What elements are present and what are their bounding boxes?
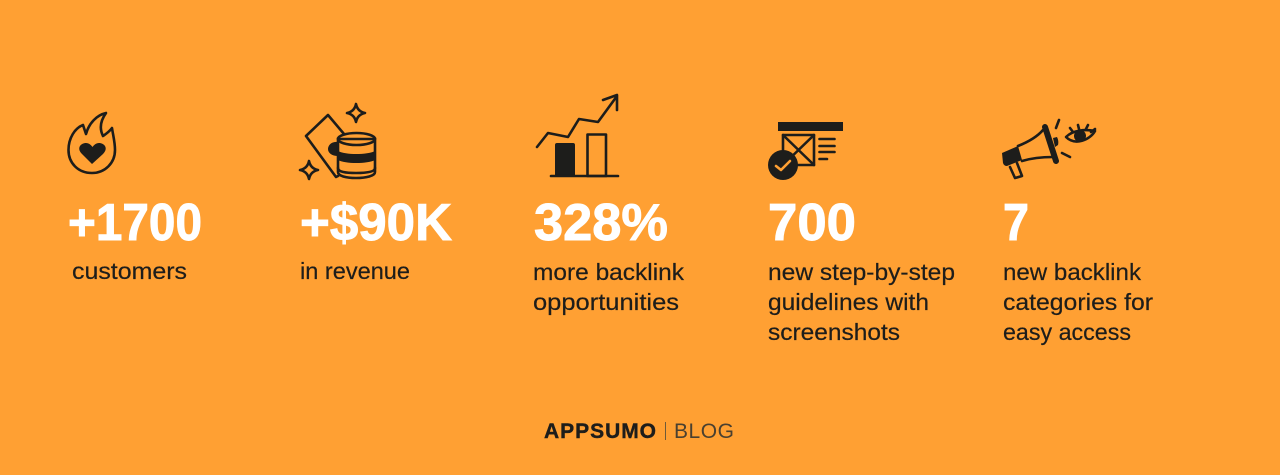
icon: growth chart: [537, 95, 618, 176]
label line 2: guidelines with: [768, 289, 929, 315]
panel: revenue: [300, 104, 452, 284]
label line 2: opportunities: [533, 289, 679, 315]
stat number: 7: [1003, 194, 1029, 252]
stat number: 700: [768, 194, 856, 252]
label line 2: categories for: [1003, 289, 1153, 315]
panel: customers: [68, 113, 202, 284]
label: customers: [72, 258, 187, 284]
label line 3: easy access: [1003, 319, 1131, 345]
logo: AppSumo Blog: [544, 420, 734, 443]
icon: megaphone and eye: [1002, 120, 1095, 178]
icon: document with check: [768, 122, 843, 180]
icon: card, coins and sparkles: [300, 104, 375, 179]
panel: backlink opportunities: [533, 95, 685, 315]
icon: flame with heart: [68, 113, 115, 173]
label: in revenue: [300, 258, 410, 284]
label: more backlink: [533, 259, 685, 285]
wordmark: APPSUMO: [544, 420, 656, 443]
stat number: +$90K: [300, 194, 452, 252]
panel: guidelines: [768, 122, 955, 345]
stat number: +1700: [68, 194, 202, 252]
stat number: 328%: [534, 194, 668, 252]
blog label: BLOG: [674, 420, 734, 443]
label line 3: screenshots: [768, 319, 900, 345]
label: new backlink: [1003, 259, 1142, 285]
panel: categories: [1002, 120, 1153, 345]
label: new step-by-step: [768, 259, 955, 285]
